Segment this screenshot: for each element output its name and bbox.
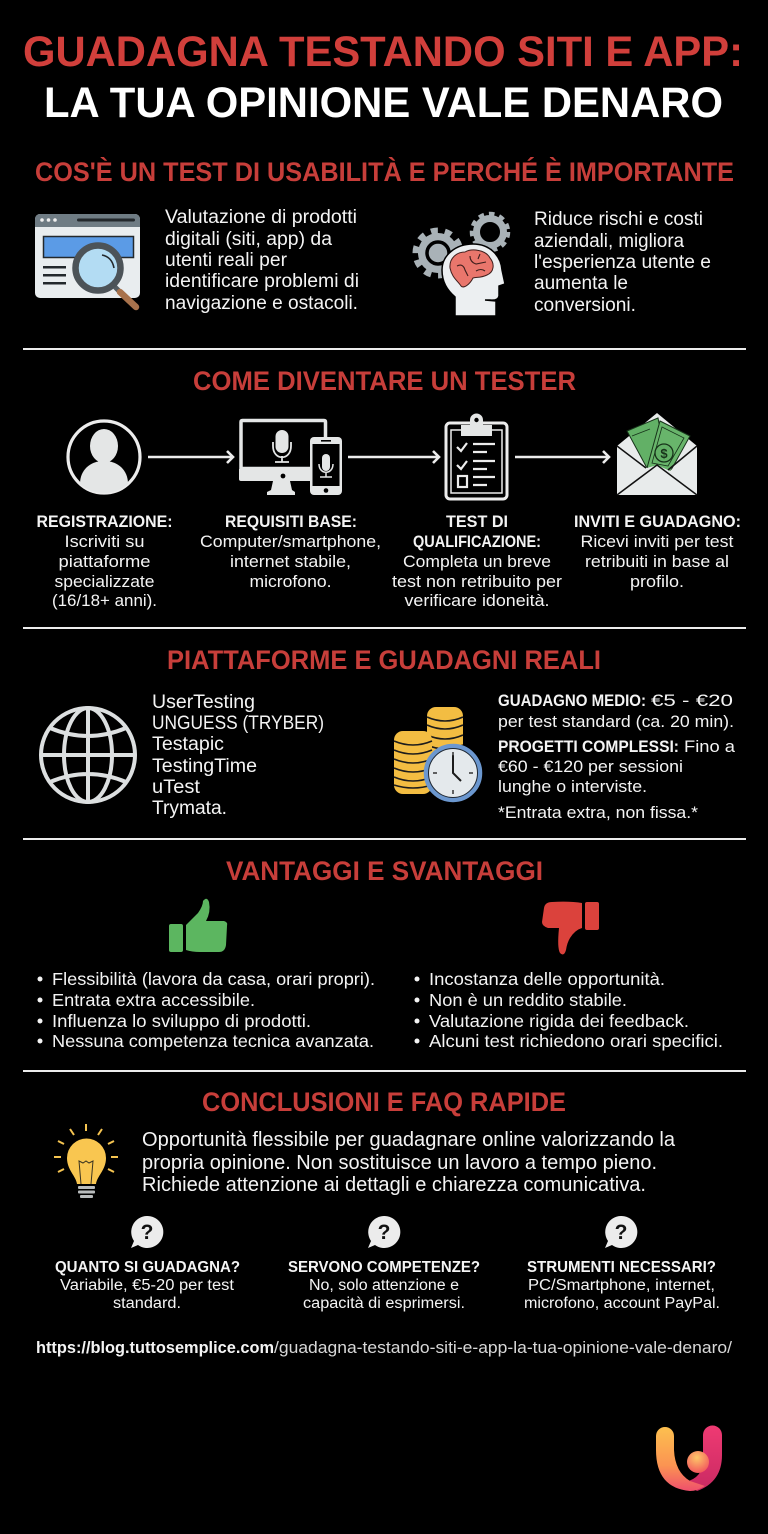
list: advantages: Flessibilità (lavora da casa, orari propri). [52, 969, 375, 989]
text: earnings: per test standard (ca. 20 min). [498, 712, 734, 731]
text: conclusion: propria opinione. Non sostituisce un lavoro a tempo pieno. [142, 1152, 657, 1174]
text: usability definition: digitali (siti, app) da [165, 229, 332, 250]
step 1: registration: specializzate [54, 572, 154, 591]
FAQ 2: No, solo attenzione e [309, 1277, 459, 1294]
step 4: invitations and earnings: retribuiti in base al [585, 552, 729, 571]
text: earnings: Fino a [684, 737, 736, 756]
FAQ 3 [524, 1259, 720, 1312]
icon: user profile [68, 421, 140, 493]
list: advantages: Entrata extra accessibile. [52, 990, 255, 1010]
list: platforms: Trymata. [152, 798, 227, 819]
list: disadvantages [414, 969, 723, 1051]
text: conclusion: Richiede attenzione ai dettagli e chiarezza comunicativa. [142, 1174, 646, 1196]
heading: usability: COS'È UN TEST DI USABILITÀ E PERCHÉ È IMPORTANTE [35, 156, 734, 187]
icon: clipboard checklist [446, 414, 507, 499]
step 1: registration [36, 512, 172, 610]
list: platforms: UNGUESS (TRYBER) [152, 713, 324, 734]
text: usability definition: Valutazione di prodotti [165, 207, 357, 228]
step 2: requirements: internet stabile, [230, 552, 351, 571]
step 1: registration: Iscriviti su [64, 532, 144, 551]
icon: FAQ bubble 1: ? [141, 1221, 153, 1244]
title: LA TUA OPINIONE VALE DENARO [44, 79, 723, 127]
title: GUADAGNA TESTANDO SITI E APP: [23, 28, 743, 76]
text: usability definition: navigazione e ostacoli. [165, 293, 358, 314]
icon: coins and clock [394, 707, 480, 800]
text: usability definition [165, 207, 359, 314]
step 3: qualification test: test non retribuito per [392, 572, 562, 591]
text: usability definition: utenti reali per [165, 250, 288, 271]
icon: FAQ bubble 2 [368, 1216, 400, 1248]
FAQ 1: Variabile, €5-20 per test [60, 1277, 235, 1294]
step 4: invitations and earnings: INVITI E GUADAGNO: [574, 512, 741, 531]
step 4: invitations and earnings: Ricevi inviti per test [580, 532, 734, 551]
step 2: requirements: Computer/smartphone, [200, 532, 381, 551]
FAQ 3: PC/Smartphone, internet, [528, 1277, 715, 1294]
icon: head with brain and gears [416, 214, 508, 316]
icon: light bulb [54, 1124, 118, 1198]
icon: thumbs up [169, 899, 227, 952]
list: platforms: UserTesting [152, 692, 255, 713]
step 2: requirements: microfono. [250, 572, 332, 591]
step 2: requirements: REQUISITI BASE: [225, 512, 357, 531]
list: platforms [152, 692, 324, 819]
icon: FAQ bubble 2: ? [378, 1221, 390, 1244]
FAQ 2: SERVONO COMPETENZE? [288, 1259, 480, 1276]
list: platforms: TestingTime [152, 756, 257, 777]
text: usability benefits: Riduce rischi e costi [534, 209, 703, 230]
text: conclusion [142, 1129, 676, 1196]
icon: FAQ bubble 3 [605, 1216, 637, 1248]
text: usability benefits: aziendali, migliora [534, 231, 684, 252]
step 2: requirements [200, 512, 381, 591]
list: platforms: uTest [152, 777, 201, 798]
icon: FAQ bubble 3: ? [615, 1221, 627, 1244]
step 3: qualification test: Completa un breve [403, 552, 551, 571]
list: advantages: Nessuna competenza tecnica avanzata. [52, 1031, 374, 1051]
icon: thumbs down [542, 902, 599, 954]
step 1: registration: (16/18+ anni). [52, 591, 157, 610]
step 4: invitations and earnings: profilo. [630, 572, 684, 591]
heading: pros and cons: VANTAGGI E SVANTAGGI [226, 856, 543, 886]
heading: conclusions: CONCLUSIONI E FAQ RAPIDE [202, 1087, 566, 1117]
step 3: qualification test: verificare idoneità. [404, 591, 550, 610]
text: earnings: GUADAGNO MEDIO: [498, 691, 646, 710]
icon: globe [41, 708, 135, 802]
text: usability definition: identificare problemi di [165, 271, 359, 292]
icon: envelope with banknotes: $ [660, 446, 668, 461]
source URL: https://blog.tuttosemplice.com [36, 1338, 274, 1357]
text: earnings: €5 - €20 [651, 691, 733, 710]
heading: platforms: PIATTAFORME E GUADAGNI REALI [167, 645, 601, 675]
text: earnings: €60 - €120 per sessioni [498, 757, 683, 776]
list: disadvantages: Non è un reddito stabile. [429, 990, 627, 1010]
FAQ 1: standard. [113, 1295, 181, 1312]
text: earnings: lunghe o interviste. [498, 777, 647, 796]
text: conclusion: Opportunità flessibile per guadagnare online valorizzando la [142, 1129, 676, 1151]
text: earnings: PROGETTI COMPLESSI: [498, 737, 679, 756]
FAQ 2: capacità di esprimersi. [303, 1295, 465, 1312]
text: usability benefits: aumenta le [534, 273, 628, 294]
text: earnings [498, 691, 736, 822]
step 3: qualification test: TEST DI [446, 512, 508, 531]
text: usability benefits: conversioni. [534, 295, 636, 316]
text: usability benefits: l'esperienza utente e [534, 252, 711, 273]
list: platforms: Testapic [152, 734, 224, 755]
source URL [36, 1338, 732, 1357]
arrow 1 [148, 451, 233, 463]
title [23, 28, 743, 127]
FAQ 2 [288, 1259, 480, 1312]
FAQ 3: STRUMENTI NECESSARI? [527, 1259, 716, 1276]
step 1: registration: piattaforme [58, 552, 150, 571]
list: advantages [38, 969, 375, 1051]
step 3: qualification test: QUALIFICAZIONE: [413, 532, 541, 551]
heading: become a tester: COME DIVENTARE UN TESTER [193, 366, 576, 396]
list: disadvantages: Valutazione rigida dei feedback. [429, 1011, 689, 1031]
text: usability benefits [534, 209, 711, 316]
list: advantages: Influenza lo sviluppo di prodotti. [52, 1011, 311, 1031]
FAQ 1 [55, 1259, 240, 1312]
FAQ 1: QUANTO SI GUADAGNA? [55, 1259, 240, 1276]
step 4: invitations and earnings [574, 512, 741, 591]
text: earnings: *Entrata extra, non fissa.* [498, 803, 698, 822]
icon: devices with microphone [239, 420, 342, 495]
arrow 3 [515, 451, 609, 463]
source URL: /guadagna-testando-siti-e-app-la-tua-opinione-vale-denaro/ [274, 1338, 732, 1357]
list: disadvantages: Alcuni test richiedono orari specifici. [429, 1031, 723, 1051]
logo [656, 1426, 722, 1491]
step 3: qualification test [392, 512, 562, 610]
icon: envelope with banknotes [617, 413, 697, 495]
arrow 2 [348, 451, 439, 463]
FAQ 3: microfono, account PayPal. [524, 1295, 720, 1312]
list: disadvantages: Incostanza delle opportunità. [429, 969, 665, 989]
icon: FAQ bubble 1 [131, 1216, 163, 1248]
step 1: registration: REGISTRAZIONE: [36, 512, 172, 531]
icon: browser with magnifier [35, 214, 140, 307]
